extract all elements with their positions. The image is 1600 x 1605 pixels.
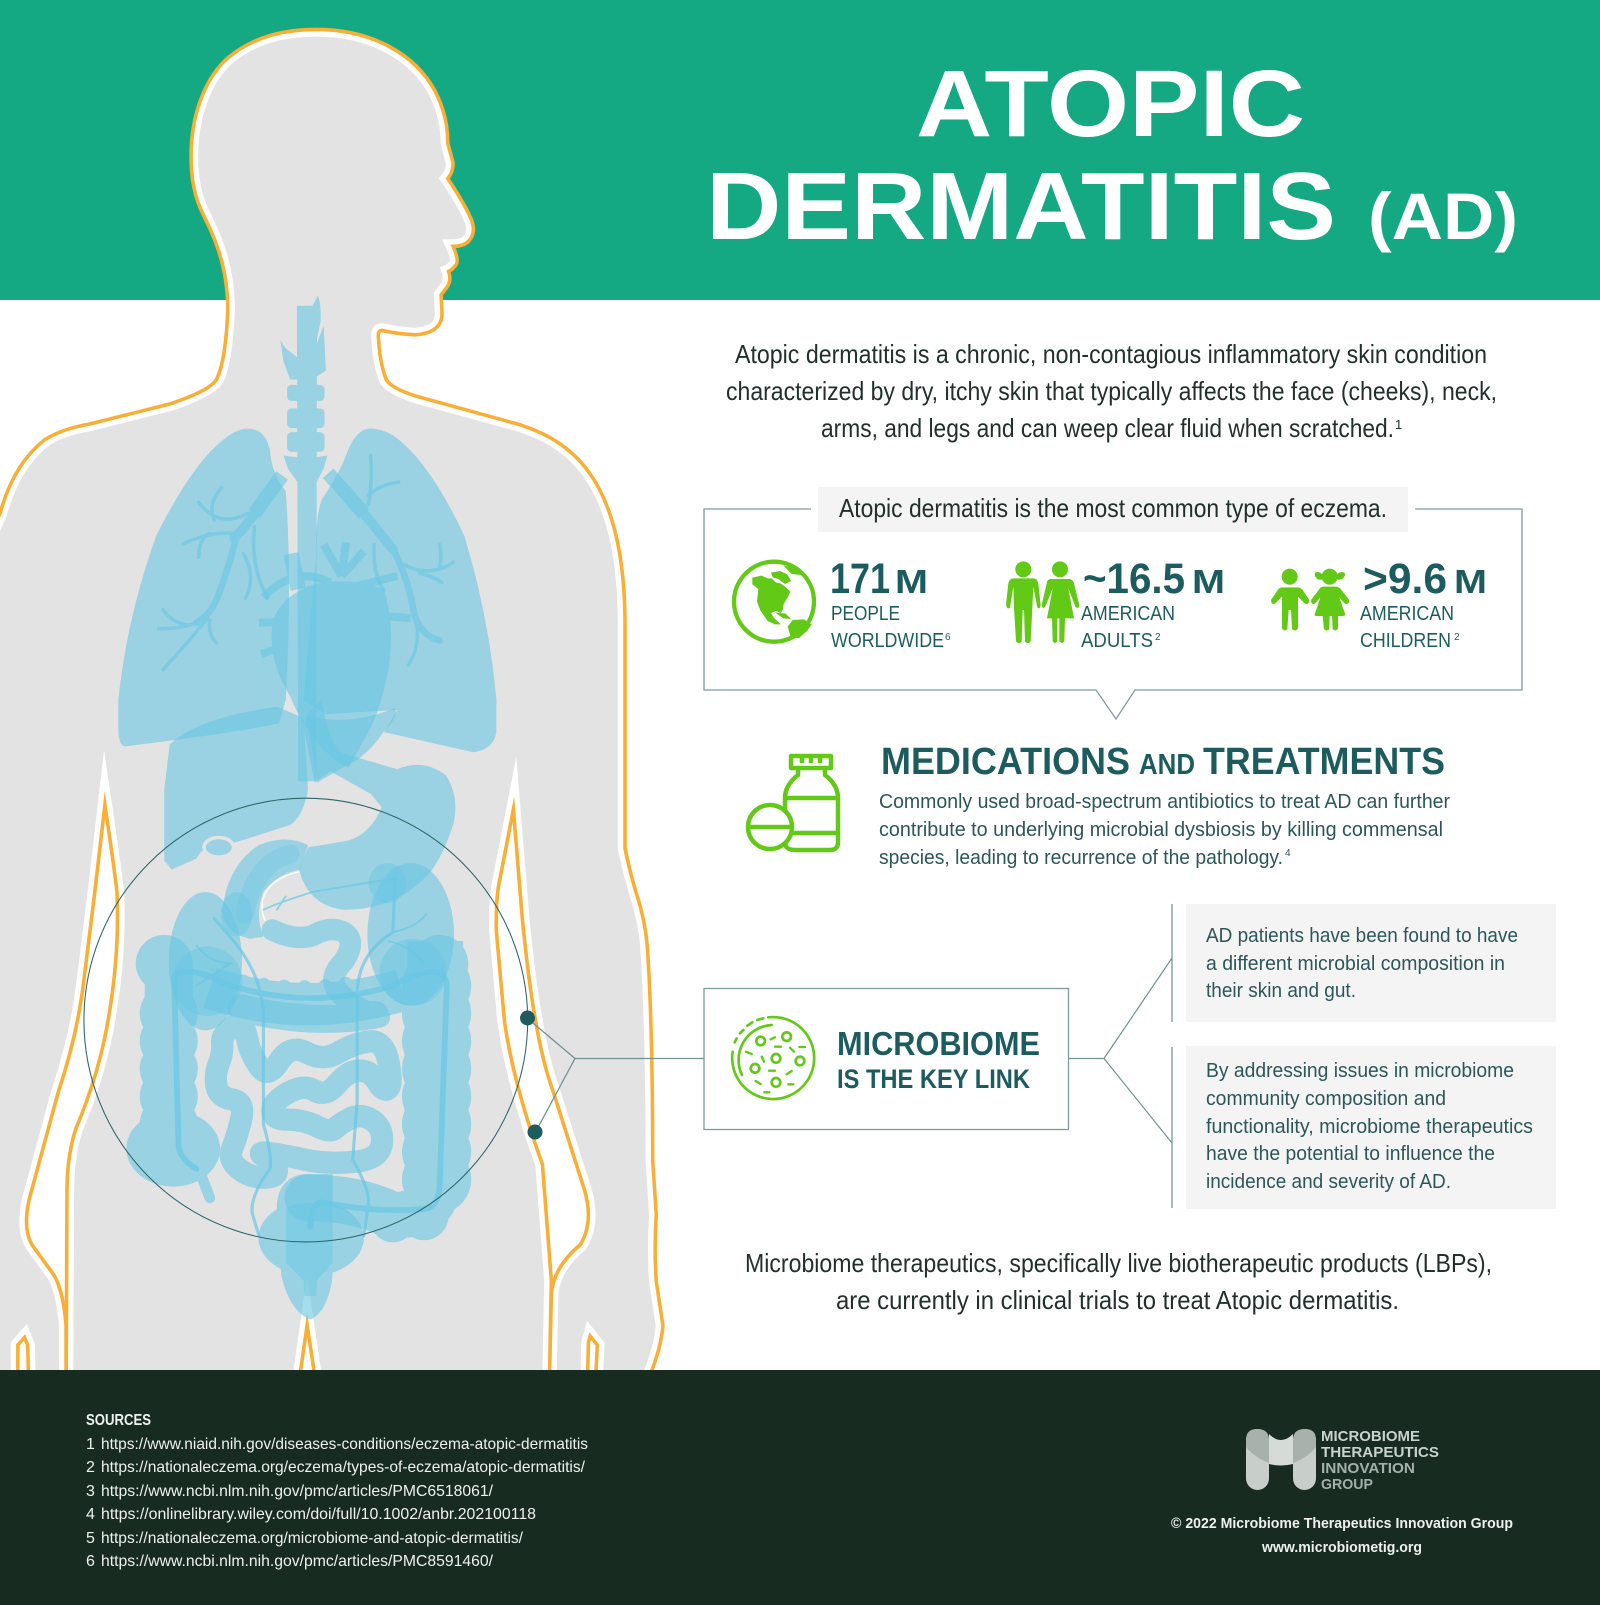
copyright and website: www.microbiometig.org (1261, 1539, 1422, 1556)
sources list: SOURCES (86, 1412, 151, 1429)
blood vessels of the abdomen (174, 879, 447, 1236)
stat: 171M people worldwide: 6 (945, 632, 951, 643)
callout: therapeutics potential (1186, 1046, 1556, 1209)
sources list: https://www.ncbi.nlm.nih.gov/pmc/articles/PMC8591460/ (101, 1553, 494, 1570)
stat: 16.5M American adults (1081, 555, 1225, 652)
statistics panel (704, 487, 1522, 719)
sources list: 5 (86, 1530, 95, 1547)
sources list: https://nationaleczema.org/eczema/types-of-eczema/atopic-dermatitis/ (101, 1459, 586, 1476)
callout: composition (1186, 904, 1556, 1022)
connector to callouts (1069, 904, 1172, 1208)
callout: therapeutics potential: community composition and (1206, 1087, 1446, 1110)
panel outline with pointer (704, 509, 1522, 719)
copyright and website (1171, 1515, 1513, 1556)
colon flexure bulbs (173, 863, 446, 1016)
magnifier circle (84, 798, 528, 1242)
callout: therapeutics potential: functionality, microbiome therapeutics (1206, 1115, 1533, 1138)
sources list: https://nationaleczema.org/microbiome-and-atopic-dermatitis/ (101, 1530, 524, 1547)
small intestine (216, 930, 391, 1178)
logo wordmark (1321, 1428, 1439, 1493)
stat: 16.5M American adults: ~16.5 (1083, 555, 1185, 603)
bladder outlet (286, 1203, 333, 1296)
microbiome label (837, 1025, 1040, 1094)
body silhouette (0, 29, 663, 1397)
body text: species, leading to recurrence of the pathology. (879, 846, 1283, 869)
stat: 16.5M American adults: AMERICAN (1081, 603, 1175, 625)
body text: Commonly used broad-spectrum antibiotics to treat AD can further (879, 790, 1450, 813)
heading: TREATMENTS (1203, 741, 1445, 783)
stat: 9.6M American children: 2 (1454, 632, 1460, 643)
title (706, 51, 1518, 260)
body text: 4 (1285, 848, 1291, 859)
duodenum and pancreas (222, 840, 308, 939)
colon flexures (169, 863, 454, 1030)
intro paragraph: 1 (1395, 417, 1402, 432)
stat: 171M people worldwide: PEOPLE (831, 603, 900, 625)
stat: 9.6M American children: CHILDREN (1360, 630, 1451, 652)
heading: AND (1139, 749, 1195, 781)
stat: 9.6M American children (1360, 555, 1487, 652)
stat: 16.5M American adults: 2 (1155, 632, 1161, 643)
sources list: 1 (86, 1436, 95, 1453)
sources list: https://www.ncbi.nlm.nih.gov/pmc/articles/PMC6518061/ (101, 1483, 494, 1500)
stat: 16.5M American adults: ADULTS (1081, 630, 1153, 652)
footer band (0, 1370, 1600, 1605)
callout: composition: AD patients have been found to have (1206, 924, 1518, 947)
heading: MEDICATIONS (881, 741, 1130, 783)
microbiome label: MICROBIOME (837, 1025, 1040, 1062)
stat: 171M people worldwide: WORLDWIDE (831, 630, 944, 652)
callout: composition: a different microbial composition in (1206, 952, 1505, 975)
stat: 9.6M American children: AMERICAN (1360, 603, 1454, 625)
logo mark (1246, 1429, 1316, 1490)
body text: contribute to underlying microbial dysbiosis by killing commensal (879, 818, 1443, 841)
logo wordmark: INNOVATION (1321, 1460, 1415, 1477)
closing statement (745, 1248, 1492, 1315)
callout: composition: their skin and gut. (1206, 979, 1356, 1002)
intro paragraph (726, 339, 1497, 443)
microbiome box (704, 988, 1068, 1130)
heart (259, 542, 411, 768)
callout: therapeutics potential: have the potential to influence the (1206, 1142, 1495, 1165)
body text (879, 790, 1450, 869)
logo: MTIG (1246, 1428, 1439, 1493)
stat: 171M people worldwide: M (895, 563, 928, 600)
header band (0, 0, 1600, 300)
panel heading background (818, 487, 1408, 532)
title: (AD) (1368, 179, 1518, 253)
stomach (299, 700, 455, 910)
sources list: 4 (86, 1506, 95, 1523)
icon: adults (1006, 561, 1079, 643)
intro paragraph: Atopic dermatitis is a chronic, non-contagious inflammatory skin condition (735, 339, 1487, 369)
icon: globe (734, 562, 814, 642)
medications section (748, 741, 1450, 869)
sources list: 2 (86, 1459, 95, 1476)
trachea and windpipe (280, 296, 327, 781)
stat: 9.6M American children: >9.6 (1363, 555, 1447, 603)
stat: 171M people worldwide (830, 555, 951, 652)
panel heading: Atopic dermatitis is the most common type of eczema. (839, 493, 1387, 523)
sources list: 3 (86, 1483, 95, 1500)
bladder and rectum (258, 1174, 364, 1320)
bronchi (158, 455, 453, 670)
icon: children (1271, 569, 1349, 631)
liver (164, 707, 308, 870)
callout: therapeutics potential: incidence and severity of AD. (1206, 1170, 1451, 1193)
arm gaps and finger outlines (18, 805, 597, 1396)
sources list: https://onlinelibrary.wiley.com/doi/full/10.1002/anbr.202100118 (101, 1506, 536, 1523)
logo wordmark: GROUP (1321, 1476, 1373, 1493)
closing statement: Microbiome therapeutics, specifically live biotherapeutic products (LBPs), (745, 1248, 1492, 1278)
copyright and website: © 2022 Microbiome Therapeutics Innovation Group (1171, 1515, 1513, 1532)
sources list (86, 1412, 588, 1570)
stat: 9.6M American children: M (1454, 563, 1487, 600)
logo wordmark: MICROBIOME (1321, 1428, 1420, 1445)
sources list: https://www.niaid.nih.gov/diseases-conditions/eczema-atopic-dermatitis (101, 1436, 588, 1453)
icon: petri dish with microbes (732, 1017, 814, 1099)
logo wordmark: THERAPEUTICS (1321, 1444, 1439, 1461)
heading (881, 741, 1445, 783)
callout: therapeutics potential: By addressing issues in microbiome (1206, 1059, 1514, 1082)
closing statement: are currently in clinical trials to treat Atopic dermatitis. (836, 1285, 1399, 1315)
colon (126, 935, 468, 1242)
intro paragraph: characterized by dry, itchy skin that typically affects the face (cheeks), neck, (726, 376, 1497, 406)
lungs (118, 428, 496, 752)
stat: 171M people worldwide: 171 (830, 555, 890, 603)
microbiome label: IS THE KEY LINK (837, 1064, 1030, 1094)
title: DERMATITIS (706, 153, 1336, 260)
icon: medicine bottle and pill (748, 756, 838, 850)
human body illustration (0, 29, 663, 1397)
sources list: 6 (86, 1553, 95, 1570)
title: ATOPIC (916, 51, 1305, 157)
intro paragraph: arms, and legs and can weep clear fluid when scratched. (821, 413, 1394, 443)
upper diaphragm shape (307, 708, 396, 783)
connector from circle to microbiome box (520, 1010, 704, 1140)
stat: 16.5M American adults: M (1192, 563, 1225, 600)
